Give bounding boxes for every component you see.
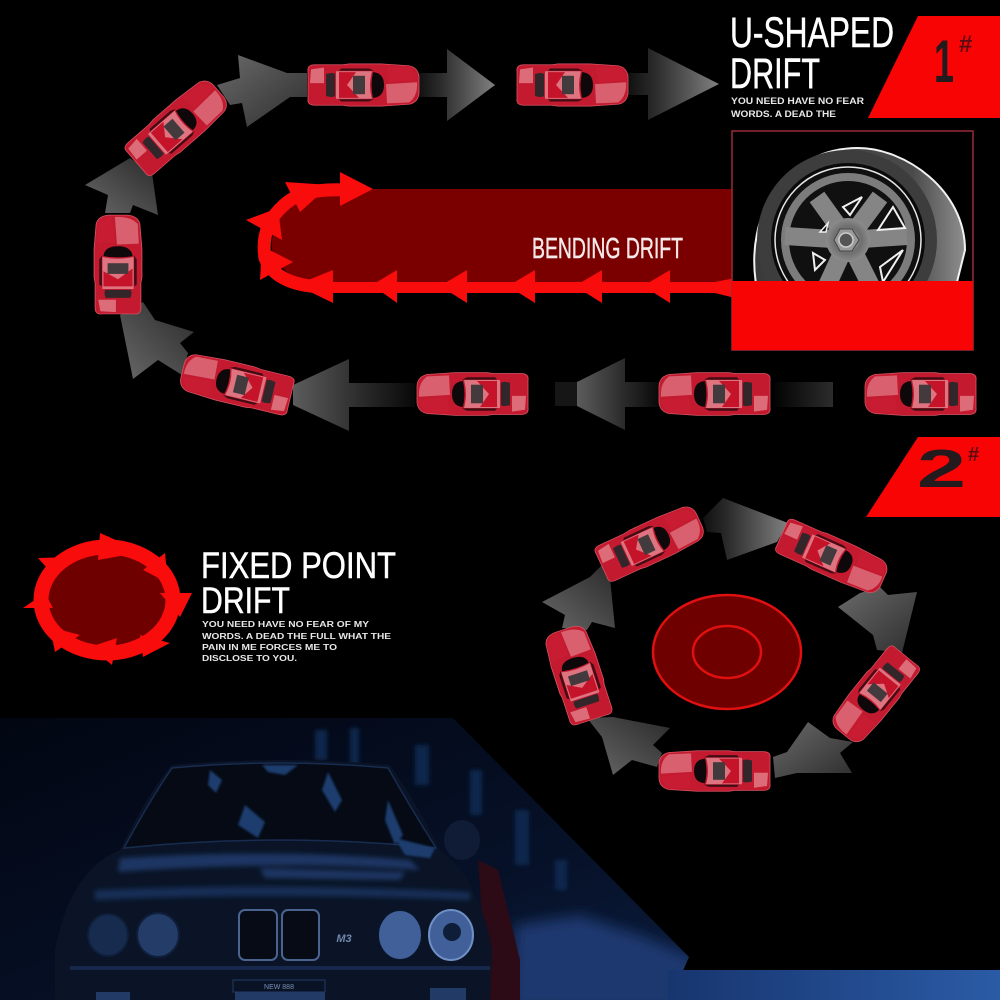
bending drift band	[246, 172, 735, 303]
fixed point description	[202, 619, 391, 663]
U-shaped description	[731, 96, 864, 120]
fixed point description: DISCLOSE TO YOU.	[202, 653, 297, 663]
U-shaped description: WORDS. A DEAD THE	[731, 109, 836, 120]
blue bottom bar	[668, 970, 1000, 1000]
U-shaped description: YOU NEED HAVE NO FEAR	[731, 96, 864, 107]
U-shaped drift title	[730, 9, 894, 98]
badge 2#: #	[968, 444, 979, 466]
licence plate	[233, 980, 325, 992]
fixed point description: PAIN IN ME FORCES ME TO	[202, 642, 337, 652]
U-shaped drift title: DRIFT	[730, 50, 820, 98]
car body	[55, 760, 492, 1000]
mirror	[444, 820, 480, 860]
lower bumper lights	[96, 992, 130, 1000]
windshield reflections	[208, 765, 435, 858]
headlights	[88, 910, 473, 960]
fixed point circle: red cars	[541, 502, 922, 791]
fixed point drift title: FIXED POINT	[201, 545, 396, 586]
misty road	[510, 915, 700, 1000]
tree highlights	[315, 728, 567, 890]
badge 1#: #	[959, 31, 972, 58]
M3 badge: M3	[336, 933, 352, 945]
badge 1#	[868, 16, 1000, 118]
badge 1#: 1	[934, 28, 954, 95]
icon: wheel	[753, 147, 966, 281]
U-shaped drift title: U-SHAPED	[730, 9, 894, 57]
U-shaped drift track: gray arrows	[85, 48, 833, 431]
red caption block	[732, 281, 973, 350]
front bumper	[70, 966, 490, 970]
fixed point circle: target	[653, 595, 801, 709]
windshield	[124, 763, 436, 848]
fixed point description: WORDS. A DEAD THE FULL WHAT THE	[202, 631, 391, 641]
fixed point icon	[23, 533, 192, 665]
U-shaped drift track: red cars	[94, 64, 976, 417]
fixed point description: YOU NEED HAVE NO FEAR OF MY	[202, 619, 369, 629]
badge 2#	[866, 437, 1000, 517]
hood highlights	[95, 853, 470, 900]
badge 2#: 2	[917, 439, 966, 499]
bending drift label: BENDING DRIFT	[532, 233, 683, 265]
night photo of BMW M3	[0, 718, 700, 1000]
tire panel	[732, 131, 973, 350]
fixed point drift title: DRIFT	[201, 580, 290, 621]
fixed point circle: gray arrows	[542, 498, 917, 778]
kidney grille	[239, 910, 319, 960]
licence plate: NEW 888	[264, 984, 294, 991]
bending drift red arrow path	[246, 172, 735, 303]
fixed point drift title	[201, 545, 396, 621]
red car side	[478, 860, 520, 1000]
